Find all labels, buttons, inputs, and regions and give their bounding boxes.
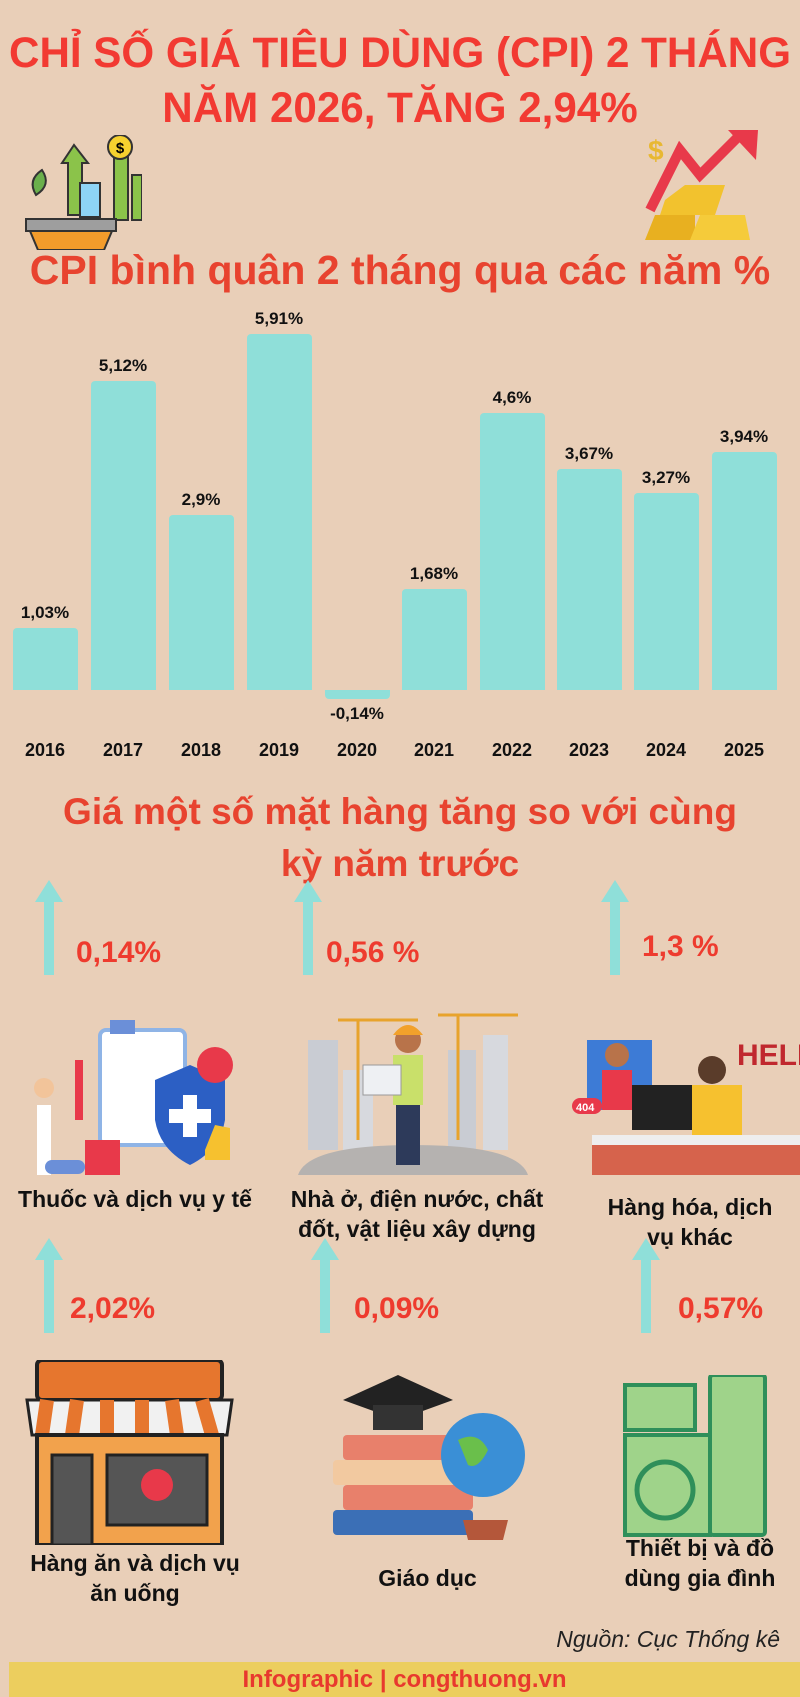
percent 0,09: 0,09% xyxy=(354,1292,439,1325)
bar chart: 5,12% xyxy=(99,356,147,375)
bar chart: -0,14% xyxy=(330,704,384,723)
illustration: household appliances xyxy=(623,1375,767,1537)
section heading xyxy=(63,791,737,884)
chart title: CPI bình quân 2 tháng qua các năm % xyxy=(30,247,770,293)
label: other goods: Hàng hóa, dịch xyxy=(608,1194,772,1220)
label: education: Giáo dục xyxy=(378,1565,477,1591)
illustration: education xyxy=(333,1375,525,1540)
bar chart xyxy=(13,309,777,760)
footer bar xyxy=(9,1662,800,1697)
bar chart: 2025 xyxy=(724,740,764,760)
arrow 1 xyxy=(35,880,63,975)
label: other goods xyxy=(608,1194,772,1250)
icon: grocery basket chart xyxy=(25,135,142,250)
title xyxy=(9,28,791,132)
bar chart: 2020 xyxy=(337,740,377,760)
section heading: kỳ năm trước xyxy=(281,843,519,884)
label: household: dùng gia đình xyxy=(625,1565,775,1591)
illustration: construction worker xyxy=(298,1014,528,1175)
arrow 2 xyxy=(294,880,322,975)
illustration: restaurant xyxy=(25,1360,234,1545)
label: restaurants: Hàng ăn và dịch vụ xyxy=(30,1550,240,1576)
icon: gold bars with rising arrow xyxy=(645,130,758,240)
arrow 5 xyxy=(311,1238,339,1333)
label: household: Thiết bị và đồ xyxy=(626,1535,774,1561)
bar chart: 3,27% xyxy=(642,468,690,487)
percent 0,56: 0,56 % xyxy=(326,936,419,969)
bar chart: 2021 xyxy=(414,740,454,760)
label: housing xyxy=(291,1186,543,1242)
illustration: services help: 404 xyxy=(576,1102,595,1114)
footer bar: Infographic | congthuong.vn xyxy=(242,1666,566,1693)
bar chart: 2016 xyxy=(25,740,65,760)
bar chart: 3,67% xyxy=(565,444,613,463)
label: household xyxy=(625,1535,775,1591)
illustration: medicine xyxy=(34,1020,233,1175)
percent 0,57: 0,57% xyxy=(678,1292,763,1325)
bar chart: 2022 xyxy=(492,740,532,760)
label: medicine: Thuốc và dịch vụ y tế xyxy=(18,1186,252,1212)
bar chart: 4,6% xyxy=(493,388,531,407)
bar chart: 2019 xyxy=(259,740,299,760)
percent 0,14: 0,14% xyxy=(76,936,161,969)
bar chart: 2,9% xyxy=(182,490,220,509)
bar chart: 2023 xyxy=(569,740,609,760)
label: housing: Nhà ở, điện nước, chất xyxy=(291,1186,543,1212)
source: Nguồn: Cục Thống kê xyxy=(556,1626,780,1652)
arrow 4 xyxy=(35,1238,63,1333)
label: restaurants xyxy=(30,1550,240,1606)
bar chart: 5,91% xyxy=(255,309,303,328)
percent 1,3: 1,3 % xyxy=(642,930,719,963)
label: other goods: vụ khác xyxy=(647,1224,733,1250)
bar chart: 2018 xyxy=(181,740,221,760)
section heading: Giá một số mặt hàng tăng so với cùng xyxy=(63,791,737,832)
icon: grocery basket chart: $ xyxy=(116,140,125,157)
bar chart: 2024 xyxy=(646,740,686,760)
arrow 3 xyxy=(601,880,629,975)
bar chart: 3,94% xyxy=(720,427,768,446)
bar chart: 1,68% xyxy=(410,564,458,583)
arrow 6 xyxy=(632,1238,660,1333)
percent 2,02: 2,02% xyxy=(70,1292,155,1325)
icon: gold bars with rising arrow: $ xyxy=(648,135,664,166)
bar chart: 1,03% xyxy=(21,603,69,622)
label: housing: đốt, vật liệu xây dựng xyxy=(298,1216,536,1242)
title: NĂM 2026, TĂNG 2,94% xyxy=(162,84,638,132)
label: restaurants: ăn uống xyxy=(90,1580,180,1606)
illustration: services help xyxy=(572,1039,800,1175)
title: CHỈ SỐ GIÁ TIÊU DÙNG (CPI) 2 THÁNG xyxy=(9,29,791,77)
bar chart: 2017 xyxy=(103,740,143,760)
